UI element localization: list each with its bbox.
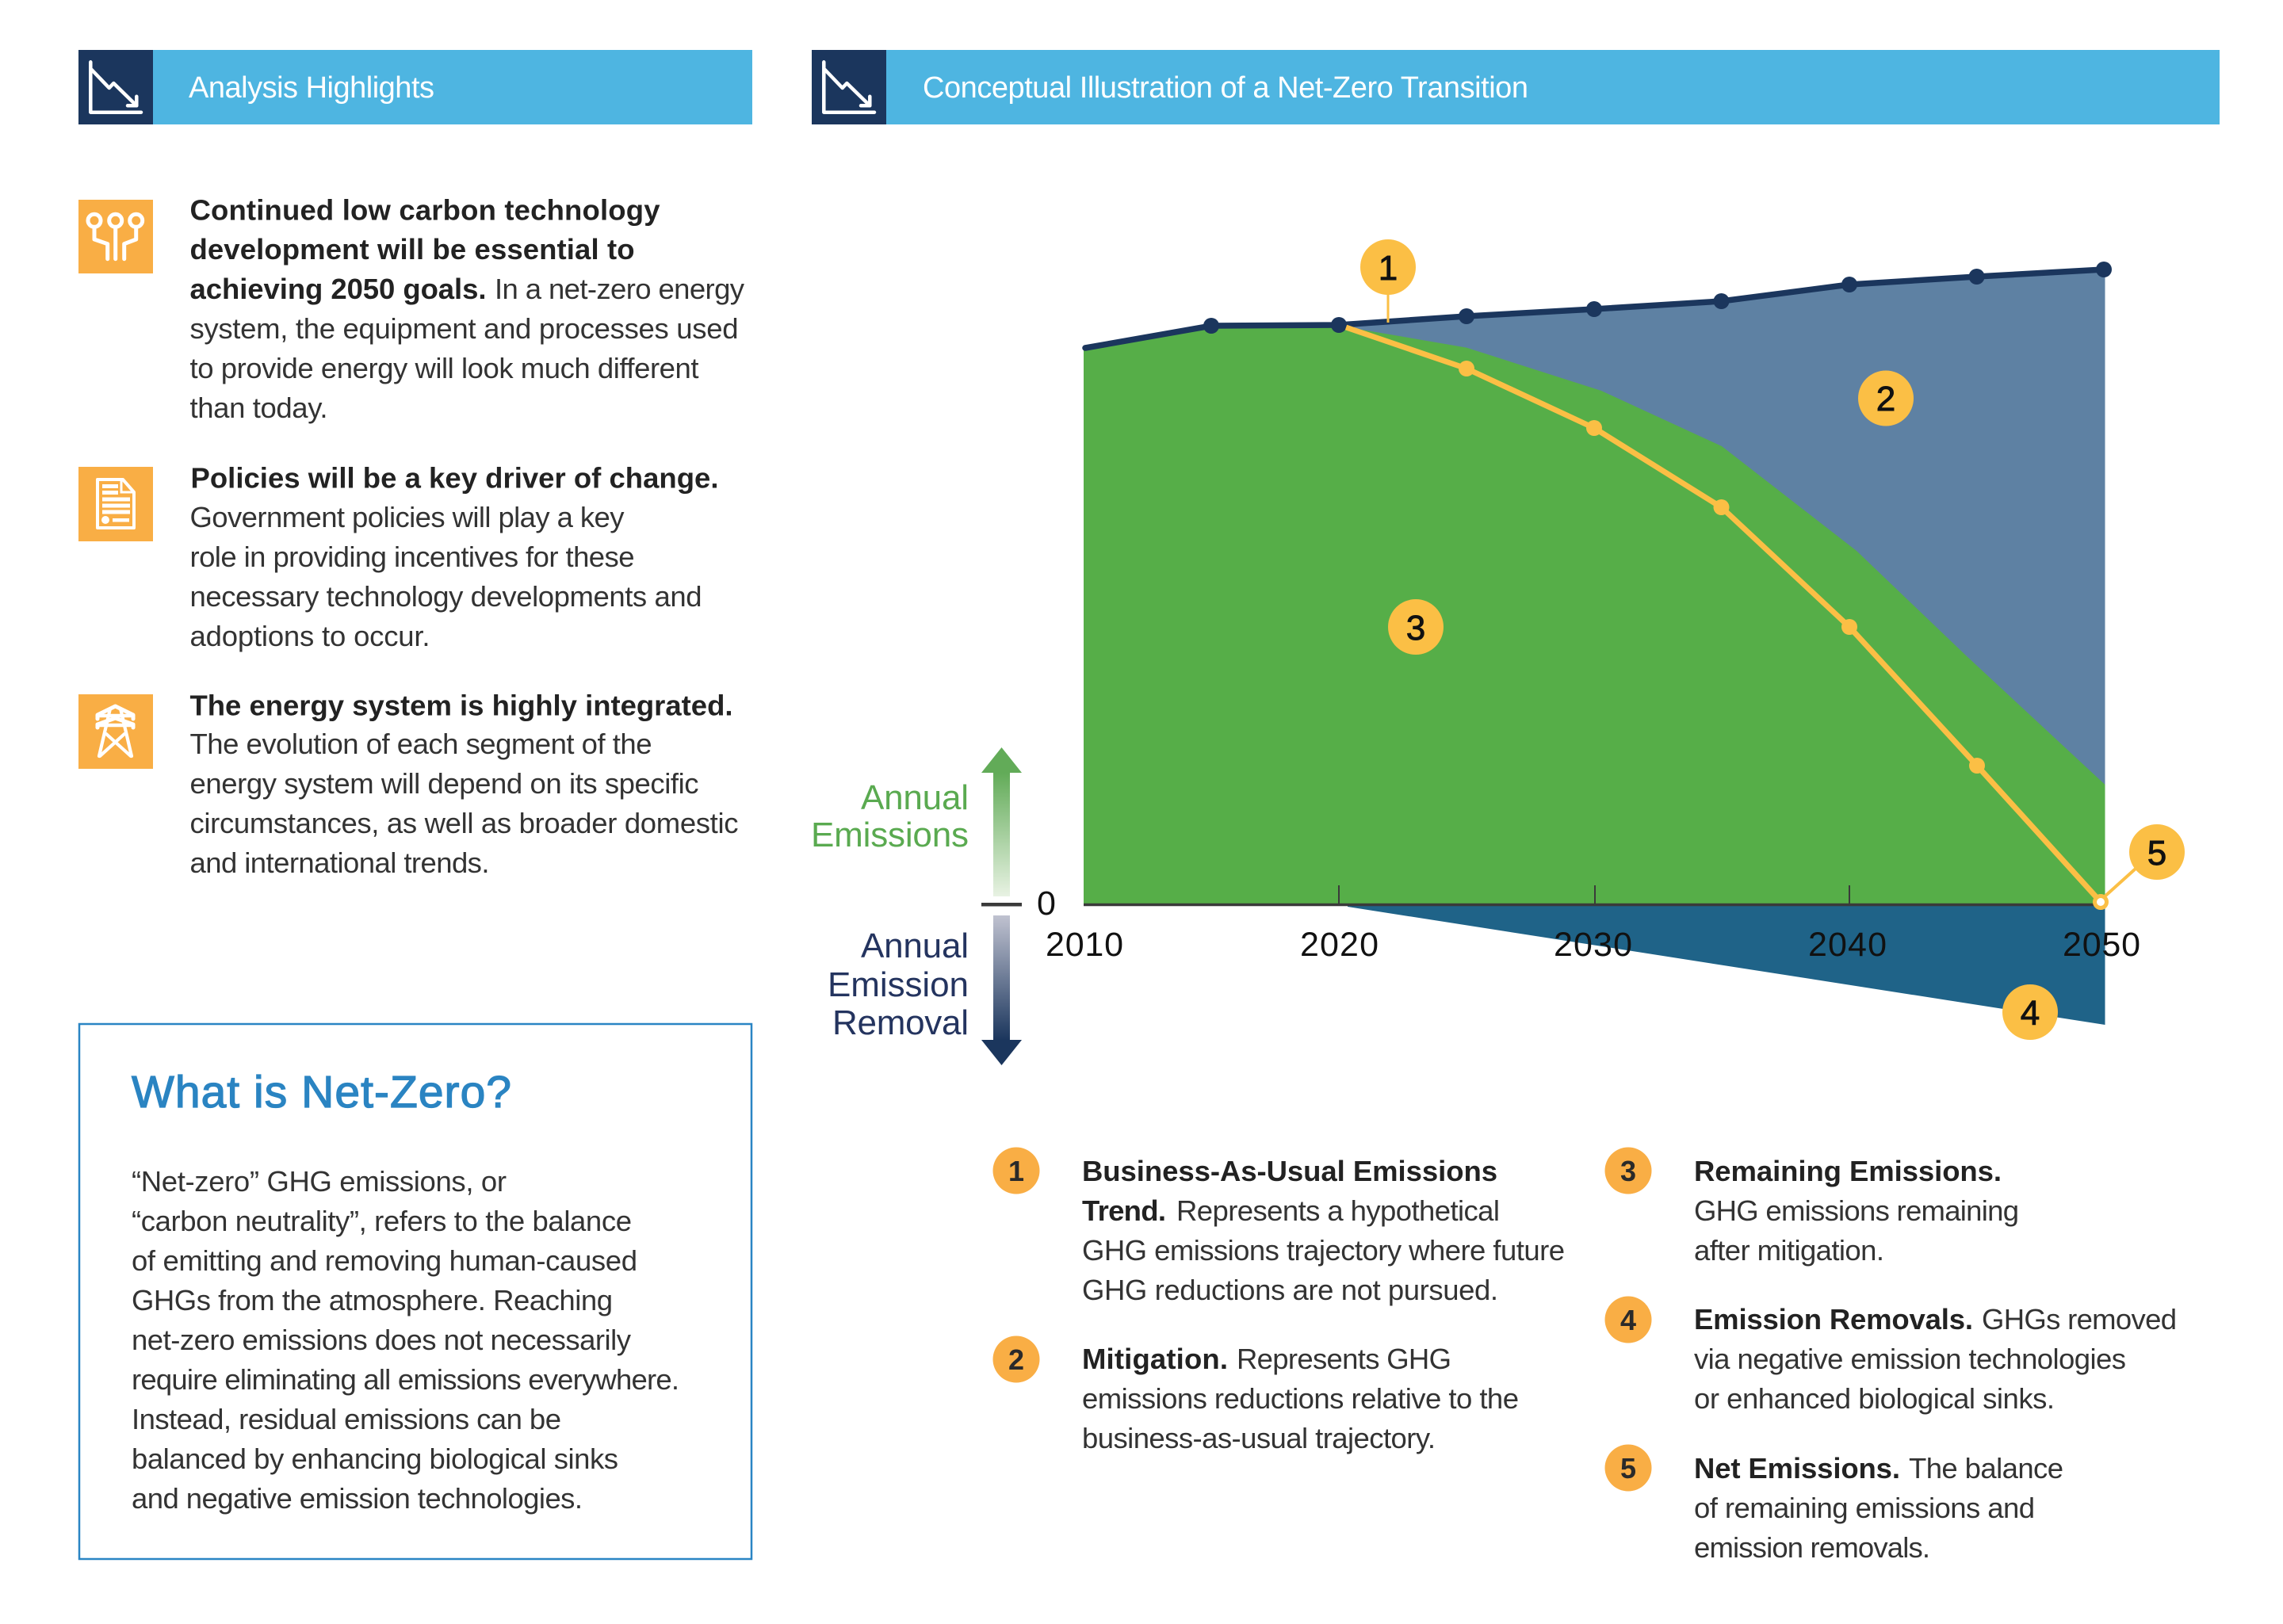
text: technology highlight: system, the equipment and processes used [190, 312, 739, 345]
legend item 2 [992, 1336, 1519, 1454]
text: emission removals [1694, 1303, 2177, 1415]
text: policies highlight: Policies will be a key driver of change. [190, 461, 718, 495]
text: net-zero definition: GHGs from the atmosphere. Reaching [132, 1284, 613, 1316]
text: integrated system highlight: and international trends. [190, 846, 490, 879]
text: integrated system highlight: energy system will depend on its specific [190, 767, 699, 800]
callout 3: 3 [1406, 609, 1425, 648]
text: policies highlight: adoptions to occur. [190, 620, 430, 652]
x-axis year labels: 2020 [1300, 926, 1379, 964]
badge 4: 4 [1620, 1304, 1636, 1336]
text: technology highlight: Continued low carbon technology [190, 193, 660, 227]
icon: document [78, 467, 153, 541]
text: net emissions: emission removals. [1694, 1531, 1930, 1564]
text: net-zero definition: require eliminating all emissions everywhere. [132, 1363, 679, 1396]
text: net-zero definition: net-zero emissions does not necessarily [132, 1324, 632, 1356]
line: net emissions [1346, 327, 2107, 908]
callout 5: 5 [2147, 834, 2166, 873]
text: net-zero definition: Instead, residual emissions can be [132, 1403, 561, 1435]
legend item 5 [1604, 1444, 2063, 1564]
icon: declining chart [824, 62, 874, 113]
x-axis year labels: 2040 [1808, 926, 1887, 964]
text: net emissions: Net Emissions. [1694, 1452, 1900, 1485]
text: net-zero definition [132, 1165, 679, 1515]
zero label: 0 [1037, 885, 1056, 923]
text: business-as-usual: Trend. [1082, 1194, 1166, 1227]
arrow: annual emissions up [981, 747, 1022, 896]
panel: policies highlight [78, 461, 718, 652]
legend item 1 [992, 1148, 1565, 1306]
text: net-zero definition: “Net-zero” GHG emissions, or [132, 1165, 507, 1198]
badge 3 [1604, 1148, 1652, 1194]
header: Conceptual Illustration [812, 50, 2220, 124]
text: policies highlight [190, 461, 718, 652]
callout 2 [1858, 371, 1914, 426]
panel: What is Net-Zero? [79, 1024, 751, 1559]
text: business-as-usual: Business-As-Usual Emissions [1082, 1155, 1497, 1187]
text: technology highlight: than today. [190, 392, 328, 424]
badge 1 [992, 1148, 1040, 1194]
text: emission removals: Emission Removals. [1694, 1303, 1973, 1336]
legend item 4 [1604, 1297, 2177, 1415]
callout 4: 4 [2021, 994, 2040, 1033]
badge 5: 5 [1620, 1452, 1636, 1485]
x-axis year labels: 2030 [1554, 926, 1632, 964]
panel: technology highlight [78, 193, 745, 424]
callout 4 [2002, 984, 2058, 1040]
text: mitigation: Represents GHG [1237, 1343, 1451, 1375]
label: annual emissions [811, 778, 969, 854]
icon: transmission tower [78, 694, 153, 769]
area: mitigation [1339, 269, 2105, 793]
text: remaining emissions: GHG emissions remaining [1694, 1194, 2019, 1227]
text: emission removals: GHGs removed [1982, 1303, 2177, 1336]
label: annual emission removal: Emission [828, 965, 969, 1004]
line: business-as-usual trend [1085, 262, 2112, 348]
label: annual emission removal [828, 927, 969, 1042]
x-axis year labels: 2010 [1046, 926, 1123, 964]
badge 5 [1604, 1444, 1652, 1492]
callout 3 [1388, 599, 1444, 655]
text: business-as-usual [1082, 1155, 1565, 1306]
axis zero dash [981, 903, 1022, 907]
badge 2 [992, 1336, 1040, 1382]
y-axis legend [811, 747, 1056, 1065]
badge 2: 2 [1008, 1343, 1024, 1376]
label: annual emission removal: Annual [861, 927, 969, 965]
callout 1: 1 [1379, 249, 1398, 288]
x-axis year labels: 2050 [2063, 926, 2140, 964]
header: Conceptual Illustration: Conceptual Illustration of a Net-Zero Transition [923, 71, 1528, 105]
x-axis year labels [1046, 926, 2140, 964]
text: mitigation: Mitigation. [1082, 1343, 1228, 1375]
icon: circuit [78, 200, 153, 273]
panel: integrated system highlight [78, 690, 739, 879]
arrow: emission removal down [981, 915, 1022, 1065]
text: net emissions: of remaining emissions and [1694, 1492, 2035, 1524]
badge 4 [1604, 1297, 1652, 1343]
text: integrated system highlight [190, 690, 739, 879]
header: Analysis Highlights: Analysis Highlights [189, 71, 434, 105]
header: Analysis Highlights [78, 50, 752, 124]
badge 3: 3 [1620, 1155, 1636, 1187]
callout 5 [2104, 824, 2185, 897]
axis and ticks [1084, 885, 2101, 905]
text: technology highlight: to provide energy will look much different [190, 352, 699, 384]
text: net-zero definition: “carbon neutrality”, refers to the balance [132, 1205, 632, 1237]
label: annual emissions: Annual [861, 778, 969, 817]
text: technology highlight: achieving 2050 goals. [190, 273, 487, 305]
badge 1: 1 [1008, 1155, 1024, 1187]
text: remaining emissions [1694, 1155, 2019, 1267]
text: net-zero definition: and negative emission technologies. [132, 1482, 583, 1515]
label: annual emission removal: Removal [832, 1003, 969, 1042]
label: annual emissions: Emissions [811, 816, 969, 854]
text: policies highlight: role in providing incentives for these [190, 541, 634, 573]
text: technology highlight: In a net-zero energy [495, 273, 745, 305]
legend item 3 [1604, 1148, 2019, 1267]
text: policies highlight: Government policies will play a key [190, 501, 625, 533]
text: net emissions: The balance [1909, 1452, 2063, 1485]
text: emission removals: or enhanced biological sinks. [1694, 1382, 2055, 1415]
icon: declining chart [90, 62, 141, 113]
text: technology highlight: development will be essential to [190, 233, 634, 266]
text: mitigation: emissions reductions relative to the [1082, 1382, 1519, 1415]
text: integrated system highlight: The evolution of each segment of the [190, 728, 652, 760]
text: emission removals: via negative emission technologies [1694, 1343, 2126, 1375]
text: technology highlight [190, 193, 745, 424]
text: mitigation: business-as-usual trajectory. [1082, 1422, 1436, 1454]
text: business-as-usual: GHG reductions are not pursued. [1082, 1274, 1498, 1306]
text: remaining emissions: Remaining Emissions. [1694, 1155, 2002, 1187]
text: net-zero definition: balanced by enhancing biological sinks [132, 1442, 618, 1475]
area: remaining emissions [1084, 326, 2105, 904]
text: policies highlight: necessary technology developments and [190, 580, 702, 613]
heading: What is Net-Zero?: What is Net-Zero? [132, 1067, 511, 1118]
text: business-as-usual: GHG emissions trajectory where future [1082, 1234, 1565, 1267]
text: mitigation [1082, 1343, 1519, 1454]
text: business-as-usual: Represents a hypothetical [1176, 1194, 1500, 1227]
callout 1 [1360, 239, 1416, 323]
text: net-zero definition: of emitting and removing human-caused [132, 1244, 637, 1277]
text: net emissions [1694, 1452, 2063, 1564]
area: emission removals [1348, 904, 2105, 1025]
text: integrated system highlight: circumstances, as well as broader domestic [190, 807, 739, 839]
callout 2: 2 [1876, 380, 1895, 418]
text: remaining emissions: after mitigation. [1694, 1234, 1884, 1267]
chart: net-zero transition [1046, 239, 2185, 1040]
text: integrated system highlight: The energy system is highly integrated. [190, 690, 732, 721]
